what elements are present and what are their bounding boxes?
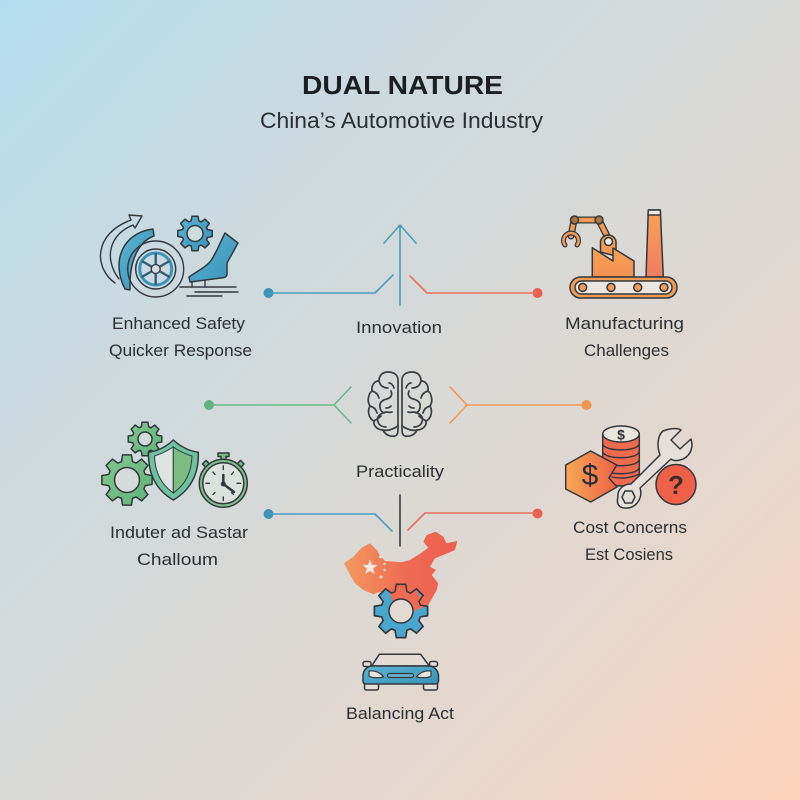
tire (128, 241, 184, 297)
icon: tire, gear and foot on pedal (101, 215, 238, 297)
connector: red upper right (410, 276, 542, 298)
claw fill (563, 233, 578, 245)
map star (362, 560, 378, 574)
right hemisphere (402, 372, 432, 436)
arm base hole (604, 238, 612, 246)
chimney (646, 210, 663, 277)
conveyor (570, 277, 677, 298)
subtitle: China’s Automotive Industry (260, 108, 543, 133)
rollers (579, 283, 668, 291)
label: manufacturing challenges (565, 314, 684, 360)
question circle: ? (668, 470, 684, 500)
wheels (364, 682, 438, 690)
pedal lines (180, 281, 238, 296)
wrench (617, 429, 692, 508)
connector: red lower right (408, 508, 542, 530)
factory (592, 248, 634, 277)
conveyor belt (575, 281, 672, 294)
dollar hexagon: $ (582, 459, 599, 492)
label: enhanced safety: Enhanced Safety (112, 314, 246, 333)
label: manufacturing challenges: Challenges (584, 341, 669, 360)
label: innovation: Innovation (356, 318, 442, 337)
wheel rim (136, 249, 176, 289)
label: cost concerns: Est Cosiens (585, 545, 673, 564)
mirrors (363, 662, 438, 666)
label: practicality: Practicality (356, 462, 445, 481)
connector: orange right (450, 387, 592, 423)
connector: center vertical (399, 495, 401, 546)
arm base (600, 235, 616, 256)
icon: car (363, 654, 438, 690)
chimney cap (648, 210, 660, 215)
label: enhanced safety (109, 314, 252, 360)
icon: coins, wrench and question (566, 426, 696, 508)
headlights and grille (369, 671, 431, 678)
label: balancing act: Balancing Act (346, 704, 454, 723)
label: induter ad sastar challoum: Induter ad Sastar (110, 523, 248, 542)
robot arm fill (571, 220, 608, 238)
curved arrow outline (101, 215, 142, 283)
label: cost concerns (573, 518, 687, 564)
wrench nut (622, 491, 635, 503)
map (344, 532, 457, 612)
label: induter ad sastar challoum (110, 523, 248, 569)
title: DUAL NATURE (302, 70, 503, 100)
roof (372, 654, 429, 666)
claw (563, 233, 578, 245)
body (363, 666, 438, 684)
blue gear (178, 216, 212, 251)
connector: blue lower left (264, 509, 392, 531)
large green gear (102, 455, 152, 505)
blue swoosh (119, 229, 154, 290)
shield (148, 440, 198, 500)
gear (374, 584, 428, 638)
foot (189, 233, 238, 282)
coin stack: $ (617, 426, 625, 442)
robot arm (571, 220, 608, 238)
label: manufacturing challenges: Manufacturing (565, 314, 684, 333)
icon: brain (368, 372, 432, 436)
label: induter ad sastar challoum: Challoum (137, 550, 218, 569)
icon: map of China with gear (344, 532, 457, 638)
stopwatch (199, 453, 247, 507)
connector: blue upper left (264, 275, 393, 298)
connector: green left (204, 387, 351, 423)
icon: robot arm factory (563, 210, 677, 298)
label: enhanced safety: Quicker Response (109, 341, 252, 360)
left hemisphere (368, 372, 398, 436)
arm joints (570, 216, 603, 224)
arrow: innovation up (384, 225, 416, 305)
right folds (402, 381, 430, 430)
map small stars (379, 556, 386, 578)
left folds (370, 381, 398, 430)
icon: gears, shield and stopwatch (102, 422, 247, 507)
small green gear (128, 422, 162, 456)
label: cost concerns: Cost Concerns (573, 518, 687, 537)
